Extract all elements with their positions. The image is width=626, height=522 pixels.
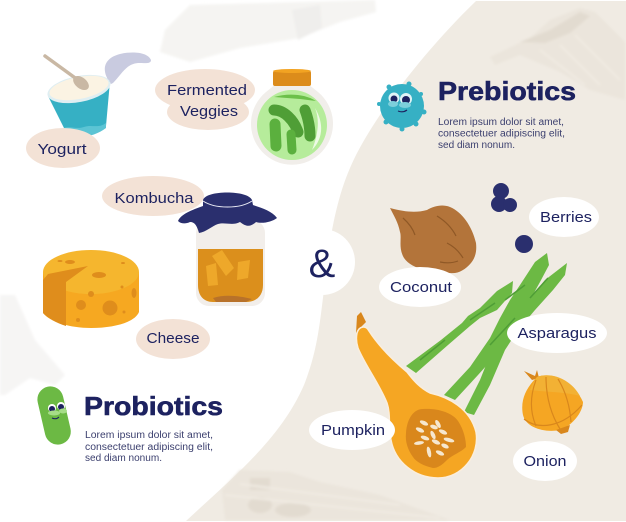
label: yogurt: Yogurt — [38, 141, 87, 158]
coconut — [390, 206, 476, 273]
blueberries — [491, 183, 533, 253]
cheese holes — [58, 260, 136, 322]
label: onion — [513, 441, 577, 481]
ampersand badge: & — [309, 242, 336, 286]
brush texture: top right — [490, 8, 625, 100]
label: fermented veggies — [155, 69, 255, 130]
cheese wheel — [43, 250, 139, 328]
scoby pieces — [212, 250, 234, 276]
yogurt lid — [105, 52, 151, 84]
prebiotics description: sed diam nonum. — [438, 140, 515, 151]
prebiotics heading: Prebiotics — [438, 76, 576, 106]
probiotics description — [85, 430, 213, 464]
cup — [48, 81, 110, 137]
brush texture: left — [0, 295, 65, 395]
kombucha jar — [178, 192, 277, 306]
probiotics description: consectetuer adipiscing elit, — [85, 442, 213, 453]
label: coconut: Coconut — [390, 279, 453, 296]
brush texture: top — [160, 0, 376, 62]
label: yogurt — [26, 128, 100, 168]
label: berries: Berries — [540, 209, 592, 226]
probiotics bacterium icon — [35, 384, 73, 447]
yogurt illustration — [45, 52, 151, 137]
pumpkin seeds — [414, 419, 455, 458]
pickles — [274, 110, 310, 150]
label: kombucha: Kombucha — [114, 190, 194, 207]
label: fermented veggies: Veggies — [180, 103, 238, 120]
prebiotics description: consectetuer adipiscing elit, — [438, 128, 565, 140]
label: asparagus — [507, 313, 607, 353]
probiotics description: sed diam nonum. — [85, 453, 162, 464]
prebiotics description: Lorem ipsum dolor sit amet, — [438, 117, 564, 128]
label: asparagus: Asparagus — [518, 325, 596, 342]
onion — [522, 370, 583, 434]
cloth cover — [178, 192, 277, 233]
probiotics heading: Probiotics — [84, 391, 223, 421]
probiotics description: Lorem ipsum dolor sit amet, — [85, 430, 213, 441]
label: berries — [529, 197, 599, 237]
prebiotics microbe icon — [377, 82, 426, 132]
brush texture: bottom — [222, 470, 450, 520]
label: kombucha — [102, 176, 204, 216]
ampersand badge — [289, 229, 355, 295]
asparagus — [406, 253, 567, 415]
prebiotics background panel — [186, 1, 626, 521]
label: pumpkin: Pumpkin — [321, 422, 385, 439]
label: fermented veggies: Fermented — [167, 82, 247, 99]
jar lid — [273, 71, 311, 86]
label: coconut — [379, 267, 461, 307]
label: cheese: Cheese — [146, 330, 200, 347]
label: pumpkin — [309, 410, 395, 450]
spoon — [45, 56, 78, 80]
label: onion: Onion — [524, 453, 566, 470]
pumpkin — [356, 312, 477, 478]
label: cheese — [136, 319, 210, 359]
prebiotics description — [438, 117, 565, 151]
fermented veggies jar — [251, 69, 333, 165]
